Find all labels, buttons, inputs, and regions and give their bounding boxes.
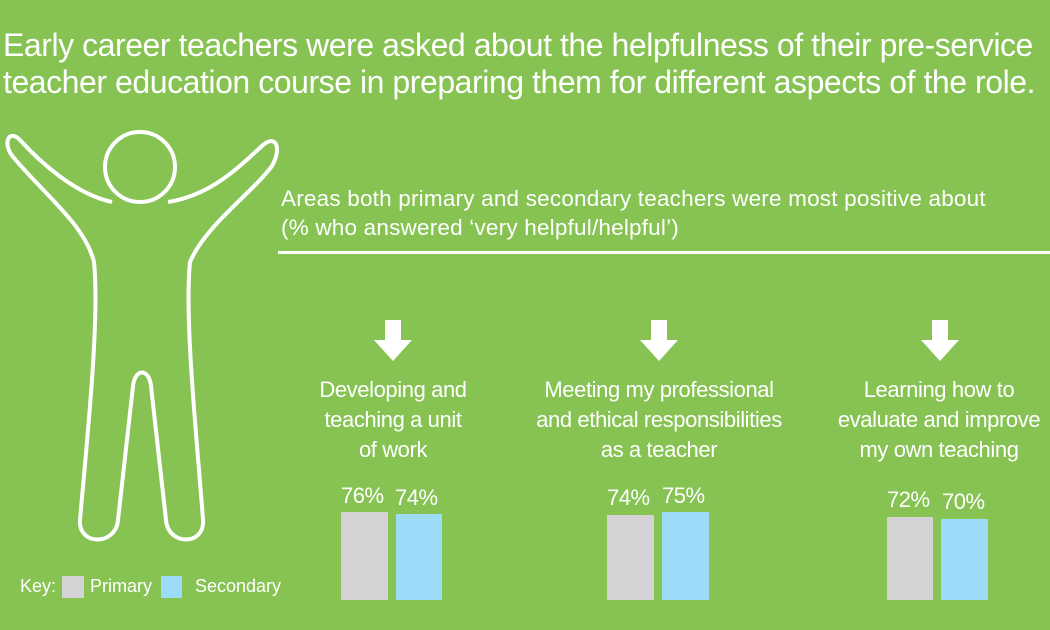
legend: Secondary <box>195 576 281 596</box>
group 1 <box>319 320 467 600</box>
label: Learning how to <box>864 377 1014 402</box>
label <box>319 377 467 462</box>
label: as a teacher <box>601 437 717 462</box>
bar chart: 74% <box>395 485 438 510</box>
group 2 <box>536 320 782 600</box>
bar chart: 72% <box>887 487 930 512</box>
label: teaching a unit <box>324 407 462 432</box>
group 3 <box>838 320 1040 600</box>
subtitle: Areas both primary and secondary teachers were most positive about <box>281 186 986 211</box>
title <box>3 27 1035 100</box>
title: teacher education course in preparing them for different aspects of the role. <box>3 64 1035 100</box>
icon: arrow down <box>374 320 412 361</box>
bar chart: 70% <box>942 489 985 514</box>
icon: person outline <box>5 130 279 542</box>
label: of work <box>359 437 427 462</box>
bar chart <box>607 483 709 600</box>
icon: arrow down <box>640 320 678 361</box>
subtitle: (% who answered ‘very helpful/helpful’) <box>281 215 679 240</box>
label: Meeting my professional <box>544 377 774 402</box>
legend <box>20 576 281 598</box>
bar chart: 74% <box>607 485 650 510</box>
bar chart: 75% <box>662 483 705 508</box>
bar chart <box>341 483 442 600</box>
label: Developing and <box>319 377 467 402</box>
label: and ethical responsibilities <box>536 407 782 432</box>
icon: arrow down <box>921 320 959 361</box>
subtitle <box>281 186 986 240</box>
label: my own teaching <box>859 437 1019 462</box>
label <box>838 377 1040 462</box>
bar chart <box>887 487 988 600</box>
title: Early career teachers were asked about the helpfulness of their pre-service <box>3 27 1033 63</box>
label <box>536 377 782 462</box>
label: evaluate and improve <box>838 407 1040 432</box>
legend: Key: <box>20 576 56 596</box>
bar chart: 76% <box>341 483 384 508</box>
legend: Primary <box>90 576 152 596</box>
